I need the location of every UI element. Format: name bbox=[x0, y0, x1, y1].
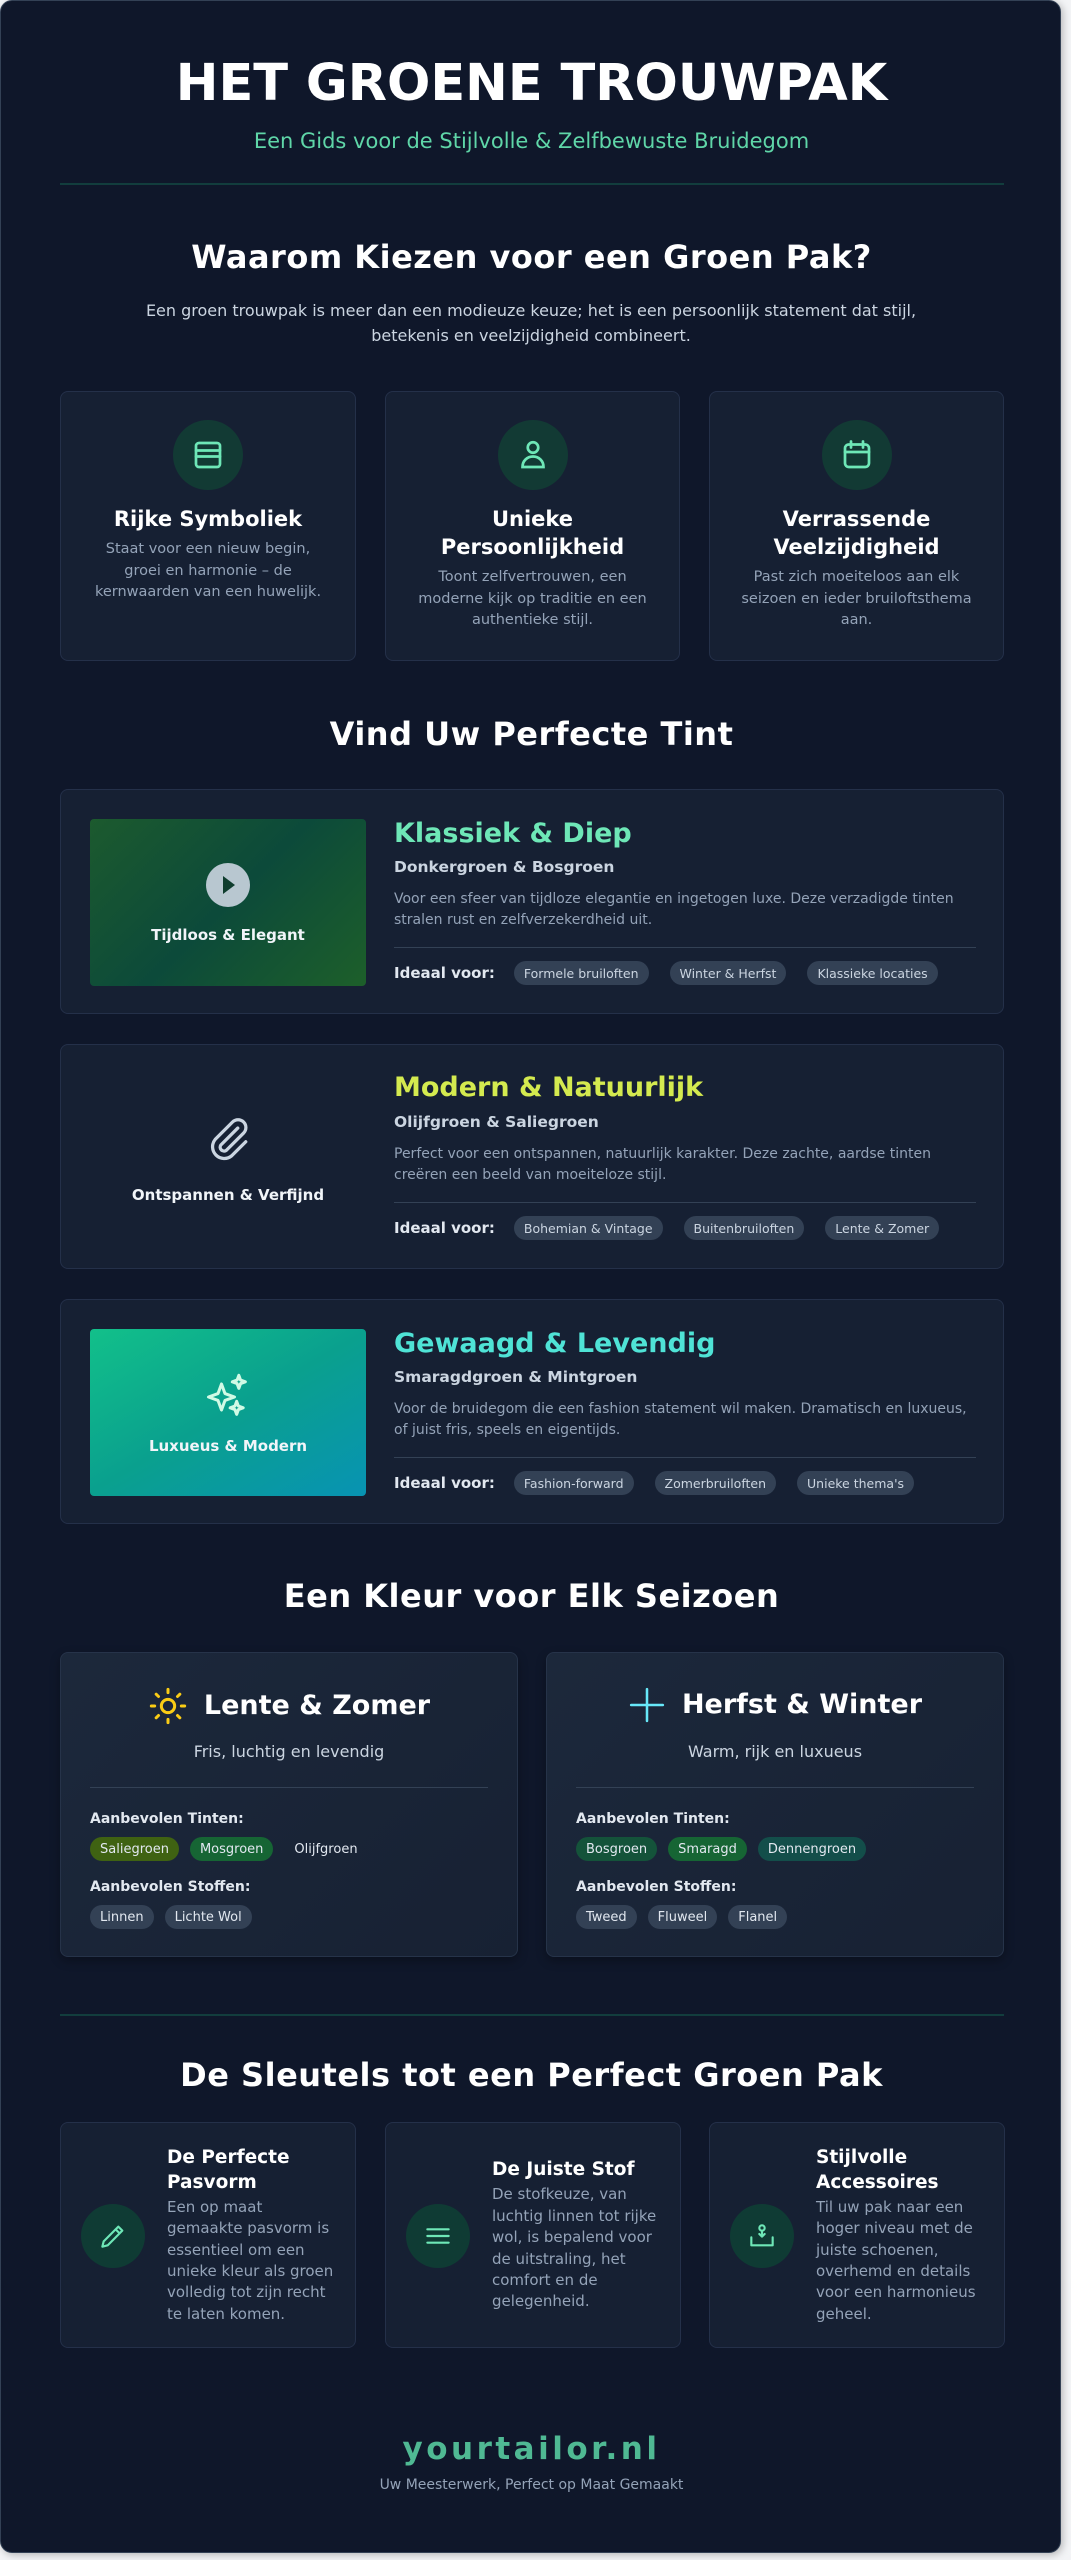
icon: card bbox=[173, 420, 243, 490]
icon: person bbox=[498, 420, 568, 490]
title: Gewaagd & Levendig bbox=[394, 1328, 715, 1359]
ideal for: Formele bruiloften bbox=[524, 966, 638, 980]
fabric pills bbox=[90, 1905, 252, 1929]
fabric pills: Linnen bbox=[100, 1910, 144, 1924]
panel: klassiek & diep: Donkergroen & Bosgroen bbox=[394, 858, 614, 876]
ideal for: Klassieke locaties bbox=[817, 966, 928, 980]
panel: herfst & winter: Warm, rijk en luxueus bbox=[688, 1742, 862, 1761]
image: luxueus & modern bbox=[90, 1329, 366, 1496]
ideal for: Ideaal voor: bbox=[394, 1219, 495, 1237]
fabric pills: Tweed bbox=[586, 1910, 627, 1924]
tint pills: Saliegroen bbox=[100, 1842, 169, 1856]
ideal for: Unieke thema's bbox=[807, 1476, 904, 1490]
ideal for: Zomerbruiloften bbox=[665, 1476, 766, 1490]
panel: klassiek & diep: Voor een sfeer van tijdloze elegantie en ingetogen luxe. Deze verzadigde tinten stralen rust en zelfverzekerdheid uit. bbox=[394, 891, 954, 928]
panel: accessoires: Stijlvolle Accessoires bbox=[816, 2147, 939, 2193]
ideal for: Ideaal voor: bbox=[394, 964, 495, 982]
ideal for bbox=[394, 1471, 914, 1495]
fabric pills: Lichte Wol bbox=[175, 1910, 242, 1924]
panel: gewaagd & levendig: Voor de bruidegom die een fashion statement wil maken. Dramatisch en luxueus, of juist fris, speels en eigentijds. bbox=[394, 1401, 967, 1438]
panel: juiste stof: De stofkeuze, van luchtig linnen tot rijke wol, is bepalend voor de uitstraling, het comfort en de gelegenheid. bbox=[492, 2185, 656, 2310]
heading: tint: Vind Uw Perfecte Tint bbox=[330, 715, 733, 753]
panel: lente & zomer: Fris, luchtig en levendig bbox=[194, 1742, 384, 1761]
season heading: Herfst & Winter bbox=[682, 1689, 922, 1720]
panel: verrassende veelzijdigheid: Verrassende bbox=[783, 507, 930, 531]
panel: rijke symboliek: Rijke Symboliek bbox=[114, 507, 302, 531]
panel: rijke symboliek: Staat voor een nieuw begin, groei en harmonie – de kernwaarden van een huwelijk. bbox=[95, 541, 321, 600]
image: ontspannen & verfijnd bbox=[132, 1118, 324, 1204]
panel: juiste stof bbox=[385, 2122, 681, 2348]
panel: perfecte pasvorm bbox=[60, 2122, 356, 2348]
panel: unieke persoonlijkheid: Unieke bbox=[492, 507, 573, 531]
tint pills: Bosgroen bbox=[586, 1842, 647, 1856]
footer bbox=[380, 2431, 684, 2493]
icon: pencil bbox=[81, 2204, 145, 2268]
image: luxueus & modern: Luxueus & Modern bbox=[149, 1436, 307, 1454]
panel: modern & natuurlijk: Olijfgroen & Saliegroen bbox=[394, 1113, 599, 1131]
intro text: Een groen trouwpak is meer dan een modieuze keuze; het is een persoonlijk statement dat stijl, betekenis en veelzijdigheid combineert. bbox=[146, 301, 916, 345]
image: tijdloos & elegant bbox=[90, 819, 366, 986]
tint pills bbox=[90, 1837, 358, 1861]
ideal for: Lente & Zomer bbox=[835, 1220, 929, 1236]
panel: herfst & winter: Aanbevolen Tinten: bbox=[576, 1811, 730, 1827]
fabric pills bbox=[576, 1905, 787, 1929]
panel: herfst & winter: Aanbevolen Stoffen: bbox=[576, 1879, 736, 1895]
ideal for: Bohemian & Vintage bbox=[524, 1220, 653, 1236]
panel: gewaagd & levendig: Smaragdgroen & Mintgroen bbox=[394, 1368, 637, 1386]
ideal for bbox=[394, 1216, 939, 1240]
tint pills: Mosgroen bbox=[200, 1842, 263, 1856]
panel: juiste stof: De Juiste Stof bbox=[492, 2159, 635, 2180]
season heading: Lente & Zomer bbox=[204, 1690, 430, 1721]
image: ontspannen & verfijnd: Ontspannen & Verfijnd bbox=[132, 1186, 324, 1204]
footer: yourtailor.nl bbox=[402, 2431, 660, 2467]
tint pills bbox=[576, 1837, 866, 1861]
panel: unieke persoonlijkheid bbox=[385, 391, 680, 661]
ideal for: Ideaal voor: bbox=[394, 1474, 495, 1492]
panel: lente & zomer: Aanbevolen Tinten: bbox=[90, 1811, 244, 1827]
tint pills: Olijfgroen bbox=[294, 1842, 358, 1856]
panel: gewaagd & levendig bbox=[60, 1299, 1004, 1524]
panel: modern & natuurlijk bbox=[60, 1044, 1004, 1269]
panel: accessoires: Til uw pak naar een hoger niveau met de juiste schoenen, overhemd en details voor een harmonieus geheel. bbox=[816, 2198, 976, 2323]
icon: calendar bbox=[822, 420, 892, 490]
image: tijdloos & elegant: Tijdloos & Elegant bbox=[151, 926, 305, 944]
panel: verrassende veelzijdigheid: Veelzijdigheid bbox=[773, 535, 940, 559]
subtitle: Een Gids voor de Stijlvolle & Zelfbewuste Bruidegom bbox=[254, 129, 809, 153]
panel: herfst & winter bbox=[546, 1652, 1004, 1957]
heading: sleutels: De Sleutels tot een Perfect Groen Pak bbox=[180, 2056, 883, 2094]
panel: accessoires bbox=[709, 2122, 1005, 2348]
fabric pills: Fluweel bbox=[658, 1910, 707, 1924]
heading: waarom: Waarom Kiezen voor een Groen Pak? bbox=[191, 238, 872, 276]
ideal for: Fashion-forward bbox=[524, 1476, 624, 1490]
tint pills: Dennengroen bbox=[768, 1842, 856, 1856]
panel: rijke symboliek bbox=[60, 391, 356, 661]
fabric pills: Flanel bbox=[738, 1910, 777, 1924]
tint pills: Smaragd bbox=[678, 1842, 737, 1856]
title: HET GROENE TROUWPAK bbox=[176, 54, 887, 113]
panel: lente & zomer bbox=[60, 1652, 518, 1957]
panel: unieke persoonlijkheid: Persoonlijkheid bbox=[441, 535, 624, 559]
icon: lines bbox=[406, 2204, 470, 2268]
panel: modern & natuurlijk: Perfect voor een ontspannen, natuurlijk karakter. Deze zachte, aardse tinten creëren een beeld van moeiteloze stijl. bbox=[394, 1146, 931, 1183]
panel: verrassende veelzijdigheid bbox=[709, 391, 1004, 661]
panel: verrassende veelzijdigheid: Past zich moeiteloos aan elk seizoen en ieder bruiloftsthema aan. bbox=[741, 569, 972, 628]
title: Modern & Natuurlijk bbox=[394, 1072, 703, 1103]
ideal for: Winter & Herfst bbox=[680, 966, 776, 980]
panel: lente & zomer: Aanbevolen Stoffen: bbox=[90, 1879, 250, 1895]
panel: klassiek & diep bbox=[60, 789, 1004, 1014]
panel: perfecte pasvorm: Een op maat gemaakte pasvorm is essentieel om een unieke kleur als groen volledig tot zijn recht te laten komen. bbox=[167, 2198, 333, 2323]
heading: seizoen: Een Kleur voor Elk Seizoen bbox=[284, 1577, 779, 1615]
title: Klassiek & Diep bbox=[394, 818, 632, 849]
ideal for bbox=[394, 961, 938, 985]
season heading bbox=[150, 1688, 430, 1724]
panel: unieke persoonlijkheid: Toont zelfvertrouwen, een moderne kijk op traditie en een authentieke stijl. bbox=[418, 569, 647, 628]
ideal for: Buitenbruiloften bbox=[694, 1220, 794, 1236]
icon: accessory bbox=[730, 2204, 794, 2268]
panel: perfecte pasvorm: De Perfecte Pasvorm bbox=[167, 2147, 290, 2193]
footer: Uw Meesterwerk, Perfect op Maat Gemaakt bbox=[380, 2477, 683, 2493]
